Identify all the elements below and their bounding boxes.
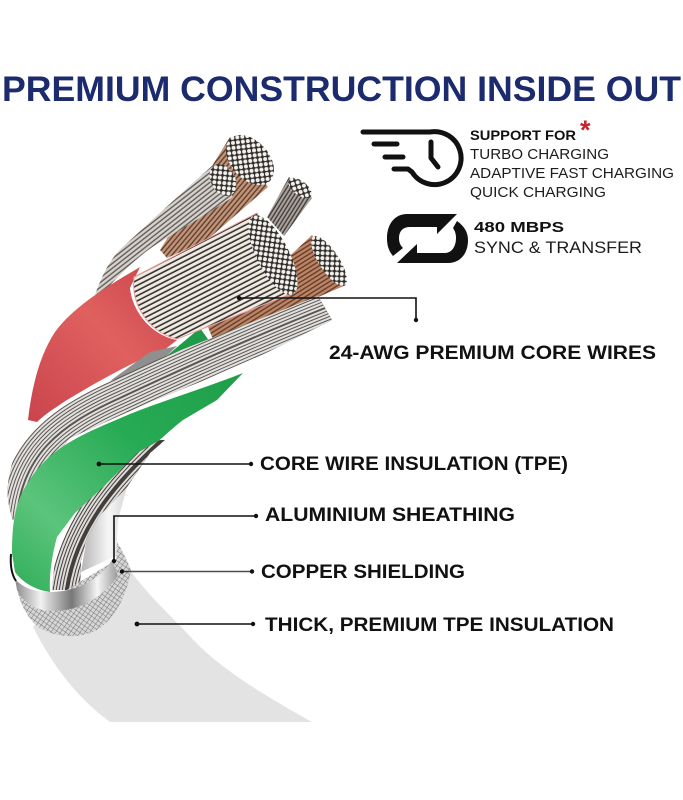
label: core wires: 24-AWG PREMIUM CORE WIRES <box>329 343 656 364</box>
red asterisk: * <box>580 115 591 145</box>
title: PREMIUM CONSTRUCTION INSIDE OUT <box>2 70 681 109</box>
charging support text: ADAPTIVE FAST CHARGING <box>470 165 674 182</box>
red core wire insulation <box>28 267 177 422</box>
charging support text: TURBO CHARGING <box>470 146 609 163</box>
charging support text <box>470 127 674 201</box>
top-back brown core wire <box>160 126 284 258</box>
rear green wire <box>163 328 210 359</box>
outer TPE insulation tail <box>33 570 312 722</box>
steel ferrule ring <box>11 554 118 611</box>
grey filler behind wires <box>110 346 177 381</box>
charging support text: SUPPORT FOR <box>470 127 576 143</box>
aluminium sheathing <box>81 487 127 572</box>
label: aluminium sheathing: ALUMINIUM SHEATHING <box>265 505 515 526</box>
data transfer text: SYNC & TRANSFER <box>474 238 642 257</box>
right brown core wire <box>208 231 353 342</box>
label: core wire insulation: CORE WIRE INSULATION (TPE) <box>260 454 568 475</box>
label: copper shielding: COPPER SHIELDING <box>261 562 465 583</box>
icon: sync arrows <box>387 214 468 263</box>
data transfer text <box>474 219 642 257</box>
icon: fast charging clock <box>363 132 461 185</box>
charging support text: QUICK CHARGING <box>470 184 606 201</box>
leader: copper shielding <box>120 569 254 574</box>
cable illustration <box>11 126 353 722</box>
front silver wire strand <box>16 306 330 525</box>
leader: core wire insulation <box>97 462 253 466</box>
data transfer text: 480 MBPS <box>474 219 564 236</box>
leader: TPE insulation <box>135 622 255 626</box>
green core wire insulation <box>12 373 243 592</box>
leader: core wires <box>237 296 418 322</box>
main silver core wire <box>134 209 307 339</box>
small grey core wire <box>267 174 315 236</box>
callout leader lines <box>97 296 418 626</box>
leader: aluminium sheathing <box>112 514 258 563</box>
rear silver strand <box>66 436 166 596</box>
label: TPE insulation: THICK, PREMIUM TPE INSULATION <box>265 615 614 636</box>
top-left silver core wire <box>95 159 242 296</box>
copper shielding knurled braid <box>17 542 131 636</box>
